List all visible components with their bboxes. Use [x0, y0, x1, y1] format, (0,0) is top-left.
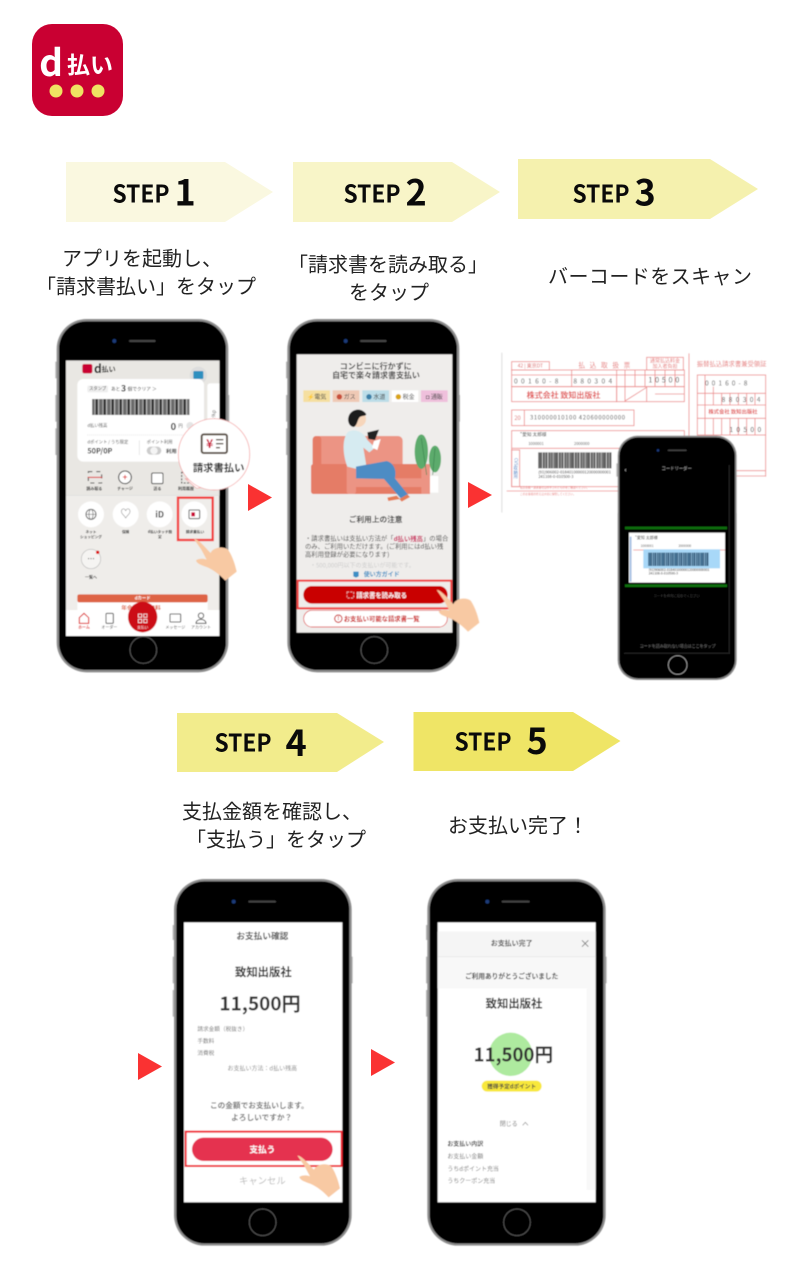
step 3 instruction text: バーコードをスキャン	[548, 260, 752, 290]
phone: barcode scanner screen: 241108-0-010500-3	[649, 570, 678, 575]
logo: d払い app icon: d	[39, 33, 63, 87]
phone: step 1 home screen: ショッピング	[80, 534, 102, 540]
step 2 instruction text	[288, 248, 488, 306]
payee and amount	[473, 996, 553, 1076]
phone: step 1 home screen: 3	[121, 383, 126, 395]
step 3: payment slip document: 加入者負担	[653, 363, 677, 370]
phone: step 2 bill reading screen	[286, 319, 479, 672]
step 4 instruction text: 「支払う」をタップ	[186, 824, 366, 852]
payment details list: うちクーポン充当	[447, 1176, 495, 1185]
phone: step 1 home screen: あと	[111, 386, 120, 392]
phone: barcode scanner screen: コードを読み取れない場合はここをタップ	[640, 643, 716, 650]
bill category tags: ● 水道	[366, 392, 385, 401]
phone: step 1 home screen	[55, 319, 250, 672]
phone: step 1 home screen: ポイント利用	[147, 438, 173, 445]
phone: step 1 home screen: d払い残高	[87, 422, 108, 429]
step 3: payment slip document: 42 | 東京DT	[518, 362, 543, 369]
button: payable bills list: お支払い可能な請求書一覧	[344, 614, 420, 623]
icon: tapping hand	[297, 1156, 340, 1197]
phone: step 1 home screen: オーダー	[101, 623, 117, 630]
step 3: payment slip document: 10500	[648, 374, 682, 385]
phone: barcode scanner screen	[616, 436, 737, 680]
phone: barcode scanner screen: (91)906002-01840100000120000000001	[649, 567, 709, 572]
payee and amount: 11,500円	[473, 1040, 553, 1067]
step 5 banner: STEP	[454, 722, 512, 758]
payee and amount: 11,500円	[219, 989, 301, 1016]
callout: 請求書払い zoom bubble	[178, 419, 250, 490]
phone: step 1 home screen: 払い	[102, 365, 116, 375]
button: read bill: 請求書を読み取る	[356, 590, 407, 599]
step 1 instruction text	[36, 242, 256, 300]
amount breakdown: 請求金額（税抜き）	[197, 1024, 248, 1033]
step 1 banner	[66, 162, 273, 222]
bill category tags: ⚡電気	[307, 392, 326, 401]
bill category tags: ● ガス	[336, 392, 356, 401]
heading: screen title: コンビニに行かずに	[340, 361, 412, 372]
confirmation question: この金額でお支払いします。	[210, 1100, 309, 1111]
confirmation question	[210, 1100, 309, 1123]
button: payable bills list	[304, 610, 447, 627]
notice text: ・請求書払いは支払い方法が「d払い残高」の場合	[305, 533, 449, 542]
step 2 instruction text: 「請求書を読み取る」	[288, 248, 488, 278]
payment details list: お支払い金額	[447, 1151, 483, 1160]
step 2 instruction text: をタップ	[349, 276, 429, 306]
arrow: step 4 to 5	[371, 1049, 395, 1076]
notice text: ご利用上の注意	[349, 514, 403, 525]
phone: barcode scanner screen: 1000001	[641, 543, 654, 548]
step 3: payment slip document: 241108-0-010500-3	[538, 474, 573, 480]
phone: step 5 payment complete	[426, 879, 607, 1246]
payment details list: お支払い内訳	[447, 1139, 483, 1148]
phone: step 1 home screen: ホーム	[78, 623, 90, 630]
phone: step 1 home screen: d払いタッチ設	[148, 529, 172, 535]
step 3: payment slip document: 00160-8	[514, 376, 562, 386]
step 3 banner: 3	[634, 164, 656, 216]
highlight box: read bill button	[298, 581, 451, 608]
step 4 banner: 4	[286, 715, 307, 767]
step 3 banner: STEP	[572, 174, 630, 210]
phone: step 1 home screen: ネット	[86, 529, 97, 535]
bill category tags: ● 税金	[395, 392, 415, 401]
step 3: payment slip document: 310000010100 420600000000	[530, 412, 625, 421]
notice text	[305, 514, 449, 569]
phone: step 1 home screen: 年会費永年無料	[121, 603, 161, 612]
amount breakdown	[197, 1024, 297, 1072]
step 3: payment slip document: 振替払込請求書兼受領証	[697, 359, 767, 368]
button: payable bills list: !	[337, 615, 339, 622]
phone: step 1 home screen: ♡	[120, 506, 131, 521]
step 4 instruction text	[182, 796, 366, 852]
step 4 banner: STEP	[214, 724, 272, 758]
notice text: のみ、ご利用いただけます。(ご利用にはd払い残	[305, 541, 444, 550]
logo: d払い app icon: 払い	[67, 46, 113, 80]
phone: step 1 home screen: +	[123, 472, 128, 483]
bill category tags: ◘ 通販	[426, 392, 443, 401]
step 3: payment slip document: 2000000	[574, 441, 589, 447]
phone: step 1 home screen: 一覧へ	[85, 573, 97, 580]
icon: tapping hand	[194, 539, 237, 581]
phone: barcode scanner screen: コードを枠内に収めてください	[653, 593, 701, 598]
phone: step 4 payment confirmation: お支払い確認	[236, 930, 289, 942]
arrow: step 1 to 2	[248, 484, 272, 511]
step 2 banner: 2	[406, 164, 427, 216]
payee and amount: 致知出版社	[486, 996, 543, 1012]
points badge	[482, 1081, 542, 1092]
text: cancel: キャンセル	[239, 1173, 286, 1187]
phone: step 1 home screen: d	[94, 360, 102, 377]
arrow: into step 4	[138, 1053, 162, 1080]
notice text: ・500,000円以下の支払いが可能です。	[310, 560, 415, 569]
points badge: 獲得予定dポイント	[487, 1081, 536, 1090]
close toggle: 閉じる	[500, 1119, 518, 1128]
step 1 instruction text: アプリを起動し、	[62, 242, 222, 272]
phone: step 1 home screen: 定	[158, 534, 162, 540]
phone: step 1 home screen: 個でクリア ＞	[128, 385, 157, 392]
step 3: payment slip document: 00160-8	[705, 378, 750, 388]
bill category tags	[303, 390, 448, 402]
heading: screen title	[332, 361, 420, 381]
phone: step 1 home screen: 50P/0P	[87, 445, 113, 456]
phone: barcode scanner screen: ‹	[625, 464, 627, 474]
callout: 請求書払い zoom bubble: ¥	[206, 435, 213, 452]
phone: step 1 home screen: dポイントカード	[210, 410, 217, 446]
button: pay	[192, 1138, 333, 1161]
step 4 banner	[177, 713, 384, 772]
phone: step 1 home screen: 支払い	[137, 624, 148, 630]
step 3: payment slip document	[501, 353, 772, 680]
step 3: payment slip document: 払込取扱票	[578, 359, 635, 369]
step 3: payment slip document: 通常払込料金	[650, 357, 680, 364]
step 3: payment slip document: 株式会社 致知出版社	[527, 390, 600, 401]
step 2 banner	[293, 162, 500, 222]
phone: barcode scanner screen: コードリーダー	[662, 465, 692, 472]
step 5 banner	[414, 712, 620, 771]
link: usage guide: 使い方ガイド	[364, 569, 400, 578]
amount breakdown: 消費税	[197, 1048, 215, 1057]
phone: step 1 home screen: dポイント / うち限定	[87, 438, 129, 445]
close toggle	[500, 1119, 528, 1128]
phone: step 1 home screen: …	[87, 553, 95, 564]
step 3: payment slip document: (91)906002-01840100000120000000001	[538, 469, 611, 475]
heading: screen title: 自宅で楽々請求書支払い	[332, 370, 420, 381]
callout: 請求書払い zoom bubble: 請求書払い	[193, 459, 244, 474]
illustration: person on sofa	[311, 410, 441, 502]
step 3: payment slip document: 株式会社 致知出版社	[708, 408, 758, 416]
step 3: payment slip document: 880304	[573, 376, 616, 386]
completion header: ご利用ありがとうございました	[465, 971, 559, 981]
step 3: payment slip document: 1000001	[528, 441, 544, 447]
step 1 banner: 1	[174, 164, 196, 216]
button: read bill	[303, 586, 448, 604]
completion header: お支払い完了	[491, 938, 533, 948]
phone: step 1 home screen: iD	[155, 508, 164, 520]
phone: step 1 home screen: 読み取る	[86, 485, 102, 492]
step 5 banner: 5	[526, 713, 548, 765]
step 5 instruction text: お支払い完了！	[448, 810, 588, 838]
completion header	[465, 938, 588, 981]
phone: step 4 payment confirmation	[173, 879, 353, 1246]
button: pay: 支払う	[249, 1143, 275, 1155]
amount breakdown: お支払い方法：d払い残高	[228, 1063, 297, 1072]
payee and amount: 致知出版社	[235, 964, 292, 980]
step 3: payment slip document: 10500	[729, 424, 764, 434]
phone: step 1 home screen: dカード	[135, 594, 151, 601]
step 3: payment slip document: 880304	[722, 394, 764, 404]
step 3: payment slip document: 払込金額・請求番号は印字されたものをご確認ください。	[520, 486, 589, 490]
payment details list: うちdポイント充当	[447, 1164, 499, 1173]
step 3 banner	[518, 159, 758, 219]
step 4 instruction text: 支払金額を確認し、	[182, 796, 362, 824]
step 1 instruction text: 「請求書払い」をタップ	[36, 270, 256, 300]
phone: step 1 home screen: アカウント	[191, 623, 211, 630]
notice text: 高利用登録が必要になります)	[305, 549, 389, 558]
phone: step 1 home screen: 送る	[153, 485, 161, 492]
amount breakdown: 手数料	[197, 1036, 215, 1045]
step 3: payment slip document: 20	[514, 413, 521, 422]
phone: barcode scanner screen: "愛知 太郎様	[635, 534, 658, 541]
phone: step 1 home screen: スタンプ	[89, 385, 107, 392]
phone: step 1 home screen: 利用履歴	[178, 485, 194, 492]
phone: step 1 home screen: 利用	[166, 447, 177, 455]
confirmation question: よろしいですか？	[231, 1112, 292, 1123]
icon: tapping hand	[437, 590, 479, 632]
phone: step 1 home screen: 0	[171, 419, 177, 433]
logo: d払い app icon	[32, 24, 123, 116]
payee and amount	[219, 964, 301, 1016]
step 1 banner: STEP	[112, 174, 170, 210]
phone: step 1 home screen: 保険	[122, 529, 130, 535]
step 3: payment slip document: このお客様の控えは大切に保管してください。	[520, 492, 576, 496]
highlight box: 請求書払い	[178, 498, 213, 540]
payment details list	[447, 1139, 499, 1185]
phone: step 1 home screen: 円	[178, 424, 183, 430]
step 3: payment slip document: CVS収納用	[513, 458, 519, 480]
phone: barcode scanner screen: 2000000	[678, 543, 691, 548]
step 3: payment slip document: "愛知 太郎様	[520, 431, 547, 438]
phone: step 1 home screen: メッセージ	[165, 624, 185, 630]
highlight box: pay button	[186, 1132, 342, 1166]
step 2 banner: STEP	[344, 174, 400, 210]
arrow: step 2 to 3	[468, 482, 492, 508]
phone: step 1 home screen: 請求書払い	[186, 529, 204, 535]
phone: step 1 home screen: チャージ	[117, 486, 133, 492]
